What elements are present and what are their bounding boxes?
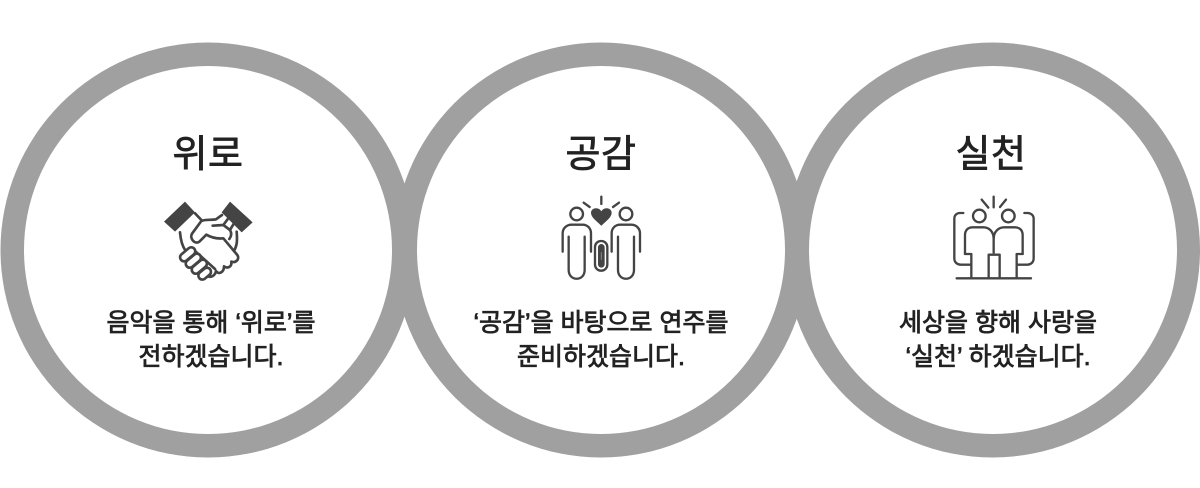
icon: handshake	[164, 202, 253, 281]
text block: 위로 description: 전하겠습니다.	[139, 343, 283, 371]
text block: 실천 description: 세상을 향해 사랑을	[899, 309, 1097, 337]
ring: circle 1	[0, 42, 416, 458]
icon: two people standing together	[954, 197, 1034, 278]
heading: 공감: 공감	[565, 134, 637, 176]
text block: 공감 description	[473, 309, 728, 371]
inner white circle 3	[809, 66, 1177, 434]
text block: 공감 description: 준비하겠습니다.	[517, 343, 685, 371]
ring: circle 3	[785, 42, 1200, 458]
heading: 실천: 실천	[955, 134, 1027, 176]
text block: 실천 description	[899, 309, 1097, 371]
inner white circle 2	[417, 66, 785, 434]
ring: circle 2	[394, 42, 808, 458]
text block: 실천 description: ‘실천’ 하겠습니다.	[905, 343, 1091, 371]
text block: 공감 description: ‘공감’을 바탕으로 연주를	[473, 309, 728, 337]
heading: 위로: 위로	[172, 134, 244, 176]
inner white circle 1	[24, 66, 392, 434]
text block: 위로 description	[106, 309, 316, 371]
text block: 위로 description: 음악을 통해 ‘위로’를	[106, 309, 316, 337]
icon: two people with heart and link	[563, 197, 640, 279]
